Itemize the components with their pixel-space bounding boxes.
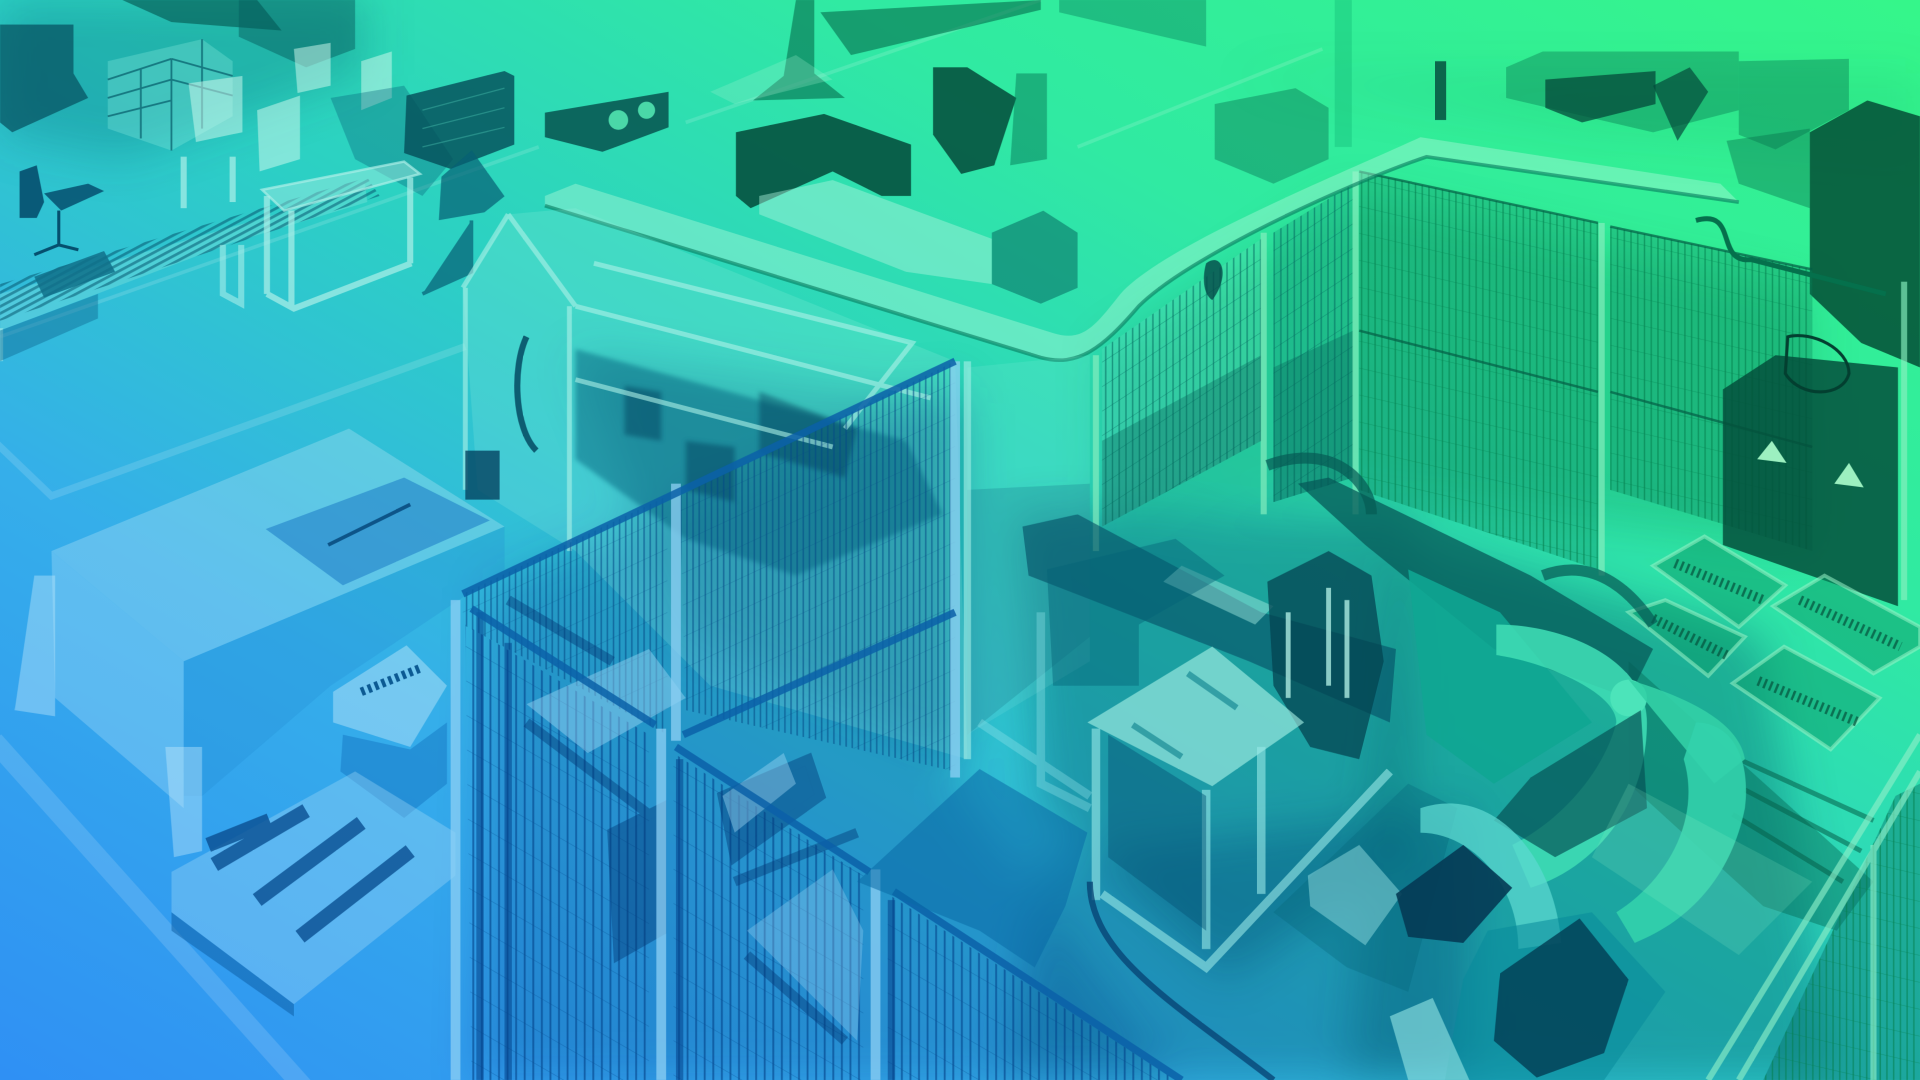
transparent side panel xyxy=(967,355,1090,735)
sloped side chute xyxy=(1047,539,1224,686)
signal tower xyxy=(1435,61,1446,120)
top-left workstations xyxy=(0,0,911,361)
link arm A xyxy=(1496,624,1647,888)
machine internals xyxy=(576,349,943,576)
motor cables xyxy=(1267,458,1653,624)
fence panels back-right xyxy=(1096,171,1904,600)
roller conveyor xyxy=(0,178,380,361)
crates xyxy=(1215,88,1329,184)
mesh: left rear panel xyxy=(463,496,667,735)
white panels on stands xyxy=(189,43,392,171)
side mesh panels xyxy=(1102,239,1261,527)
assembly station xyxy=(980,514,1396,967)
far-right workstation xyxy=(1506,51,1739,132)
mounting plate xyxy=(1390,998,1469,1080)
wooden pallet xyxy=(171,771,456,1016)
dark metal bin 2 xyxy=(545,92,669,152)
dark metal bin 1 xyxy=(404,71,514,169)
machine glass hood xyxy=(463,208,967,759)
floor markings xyxy=(0,0,1322,1080)
tool head xyxy=(1267,551,1384,759)
robot dark joint xyxy=(1494,710,1647,857)
table top xyxy=(1087,647,1304,786)
grey station top xyxy=(1059,0,1206,47)
clutter behind panels xyxy=(331,86,453,196)
control box xyxy=(465,451,500,500)
small crates beside lids xyxy=(992,211,1078,304)
link arm B xyxy=(1629,680,1745,784)
dark bin right xyxy=(1810,100,1920,367)
interior pale plates xyxy=(527,649,686,753)
tall floor pipe xyxy=(1335,0,1352,147)
machine cluster top-left xyxy=(0,24,88,132)
mesh: front middle panel xyxy=(673,753,863,1080)
cables on floor xyxy=(1090,882,1273,1080)
dark inner uprights xyxy=(480,612,891,1080)
work table xyxy=(184,157,420,309)
box legs xyxy=(15,576,202,857)
dark electrical cabinet xyxy=(1696,219,1898,606)
industrial robot xyxy=(1267,458,1746,1080)
robot stand top xyxy=(753,0,1041,100)
mesh panel 1 xyxy=(1359,171,1598,569)
right-side fence xyxy=(1592,735,1920,1080)
stool xyxy=(422,153,502,294)
parts box and dark frame xyxy=(1273,784,1457,992)
mesh: upper rear panel xyxy=(680,361,955,771)
posts xyxy=(1096,171,1904,600)
enclosed machine xyxy=(463,208,1090,759)
conveyor with parts xyxy=(1022,514,1396,722)
servo motor xyxy=(1396,845,1512,943)
mesh: front right panel xyxy=(888,894,1176,1080)
mesh: front left panel xyxy=(465,624,649,1080)
blue pad on lid xyxy=(266,478,490,585)
glossy floor sheet xyxy=(857,769,1087,967)
large white box xyxy=(15,429,504,857)
crate of parts xyxy=(333,645,447,818)
chair xyxy=(20,165,104,255)
turntable ring xyxy=(1420,803,1561,949)
fence posts and rails xyxy=(456,361,955,1080)
dark metal bin 3 xyxy=(736,114,911,208)
cable duct xyxy=(545,137,1739,360)
top lids behind machine xyxy=(759,180,992,284)
parts crates xyxy=(1629,536,1920,931)
dark bars seen inside cage xyxy=(508,600,857,1041)
mesh panel 2 xyxy=(1610,227,1812,551)
stacked crates xyxy=(108,39,233,151)
robot upper arm xyxy=(1298,478,1653,698)
black bag xyxy=(933,67,1016,174)
hood frame xyxy=(463,214,931,551)
top-center and top-right background equipment xyxy=(710,0,1920,367)
table legs xyxy=(1096,729,1390,967)
front safety fence xyxy=(456,361,1182,1080)
robot base xyxy=(1445,912,1665,1080)
crate stack xyxy=(1629,661,1873,931)
